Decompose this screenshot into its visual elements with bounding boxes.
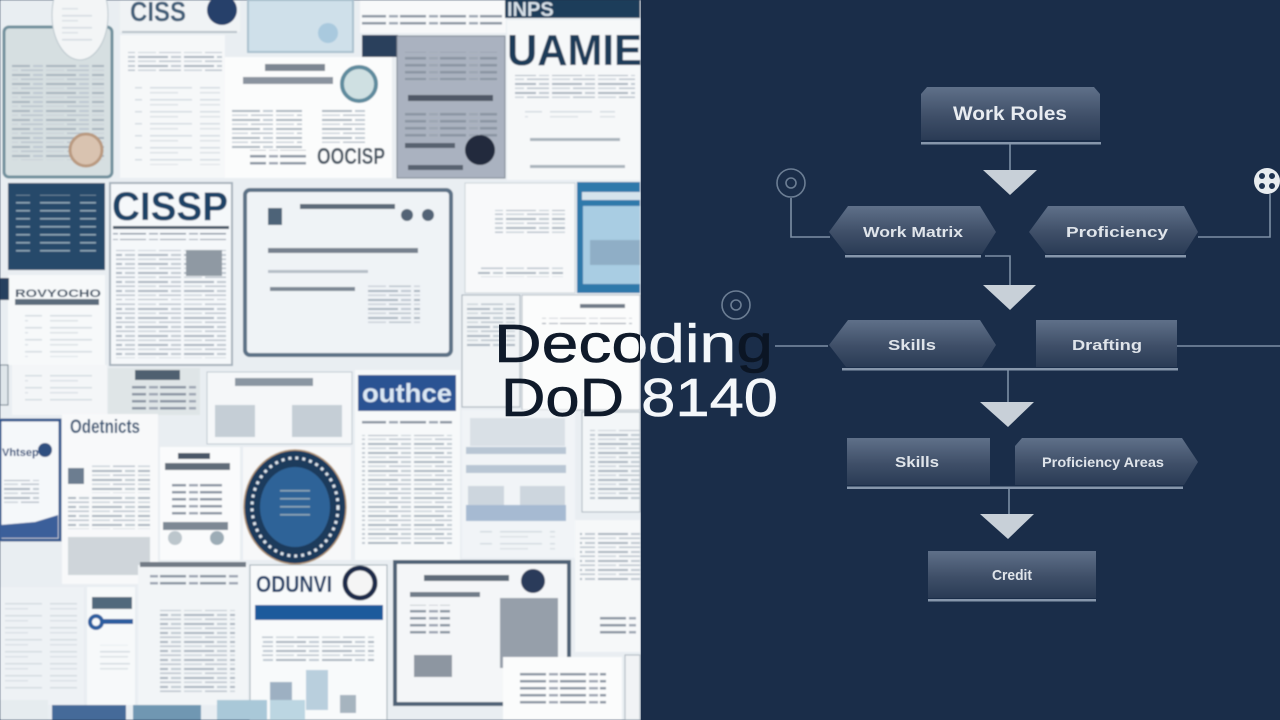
- flowchart box: Credit: Credit: [992, 567, 1032, 584]
- panel: certificate collage: [0, 0, 642, 720]
- document: grey note: [108, 368, 200, 415]
- arrow: down: [980, 514, 1034, 539]
- document: letter: [120, 35, 225, 178]
- document: top text strip: [360, 0, 506, 33]
- flowchart box: Drafting: [1036, 320, 1177, 367]
- document: right memo: [575, 520, 640, 652]
- document: Odetnicts letter: Odetnicts: [70, 417, 140, 438]
- arrow: down: [983, 285, 1036, 310]
- title: [494, 314, 778, 428]
- flowchart box: Skills: Skills: [888, 337, 936, 354]
- document: wide memo: [207, 372, 352, 444]
- document: letter with lines: [465, 183, 575, 293]
- document: blue header report: outhce: [362, 378, 452, 408]
- icon: outline circle: [777, 169, 805, 197]
- flowchart box: Work Matrix: Work Matrix: [863, 224, 964, 241]
- flowchart box: Proficiency Areas: Proficiency Areas: [1042, 454, 1164, 470]
- flowchart: work roles: [722, 87, 1280, 602]
- document: ODUNVI report: ODUNVI: [256, 571, 332, 597]
- document: CISSP certificate: [110, 183, 232, 365]
- flowchart box: Work Roles: [921, 87, 1101, 144]
- document: central framed certificate: [245, 190, 451, 355]
- document: ODUNVI report: [250, 565, 387, 720]
- bottom faded blue strip: [51, 699, 306, 720]
- flowchart box: Credit: [928, 551, 1096, 602]
- arrow: down: [980, 402, 1034, 427]
- document: UAMIE certificate: UAMIE: [507, 26, 642, 75]
- document: CISSP certificate: CISSP: [112, 185, 228, 229]
- document: front note bottom right: [503, 655, 640, 720]
- flowchart box: Proficiency: Proficiency: [1066, 224, 1169, 241]
- document: narrow left strip: [0, 365, 107, 415]
- flowchart box: Work Matrix: [829, 206, 996, 258]
- document: pale blue sheet: [248, 0, 353, 52]
- divider: [842, 368, 1178, 370]
- divider: [847, 486, 1183, 489]
- document: letter left: ROVYOCHO: [15, 288, 102, 300]
- document: Odetnicts letter: [62, 414, 158, 584]
- document: pale sheet bottom left: [6, 603, 76, 688]
- document: pale report: [466, 410, 569, 544]
- flowchart box: Skills lower: Skills: [895, 454, 939, 471]
- panel: navy background: [641, 0, 1280, 720]
- flowchart box: Proficiency Areas: [1015, 438, 1198, 485]
- flowchart box: Drafting: Drafting: [1072, 337, 1142, 354]
- document: blue brochure: [577, 182, 640, 293]
- document: center listing: [160, 447, 240, 560]
- arrow: down: [983, 170, 1037, 195]
- document: framed certificate top left: [4, 0, 112, 177]
- banner: navy top right: [505, 0, 640, 21]
- flowchart box: Skills: [829, 320, 996, 367]
- document: blue chart brochure: [0, 420, 60, 540]
- connector lines: [775, 144, 1280, 516]
- document: top seal header: [120, 0, 240, 33]
- flowchart box: Skills lower: [847, 438, 990, 485]
- document: list sheet: [138, 562, 248, 705]
- icon: outline circle on title: [722, 291, 750, 319]
- document: right letter: [582, 412, 640, 512]
- document: white certificate with seal: [225, 57, 392, 178]
- document: blue header report: [355, 370, 460, 560]
- document: grey certificate: [362, 35, 505, 178]
- document: UAMIE certificate: [507, 20, 642, 180]
- icon: round blue seal: [243, 447, 351, 564]
- document: letter behind title: [522, 295, 640, 410]
- flowchart box: Proficiency: [1029, 206, 1198, 258]
- document: framed seal certificate: [395, 562, 569, 704]
- document: letter left: [0, 275, 105, 365]
- document: white certificate with seal: OOCISP: [317, 143, 385, 169]
- flowchart box: Work Roles: Work Roles: [953, 104, 1067, 125]
- document: dark teal panel: [8, 183, 105, 270]
- icon: white circle: [1254, 168, 1280, 194]
- document: blue logo sheet: [87, 587, 135, 705]
- title: Decoding: [494, 314, 773, 374]
- title: DoD 8140: [501, 368, 778, 428]
- document: blue chart brochure: Vhtsep: [2, 447, 39, 459]
- document: spreadsheet: [462, 295, 520, 407]
